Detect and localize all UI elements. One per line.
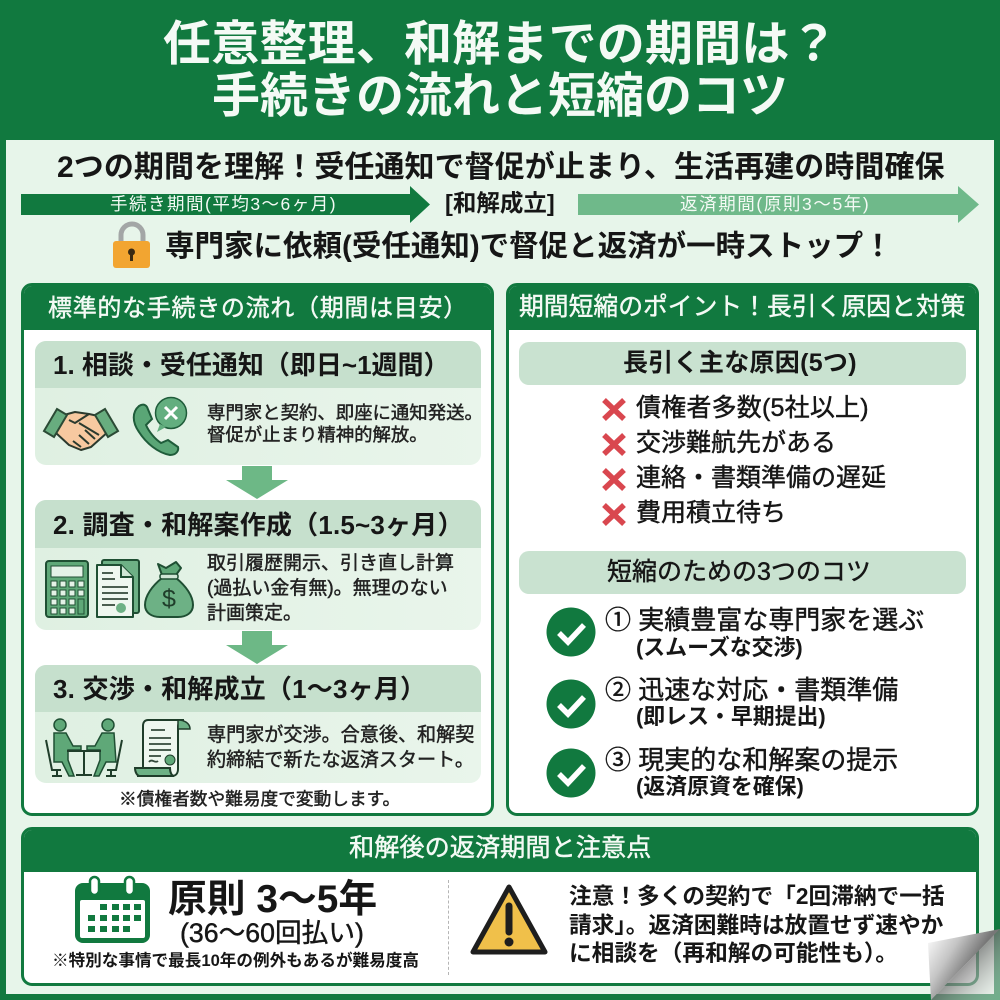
- timeline arrow: repayment period: [578, 186, 979, 223]
- exception note: ※特別な事情で最長10年の例外もあるが難易度高: [52, 951, 419, 970]
- step 1 header: [35, 341, 481, 388]
- icon: money bag: [144, 561, 194, 618]
- icon: red cross 4: [602, 503, 626, 526]
- step 2 header: [35, 500, 481, 548]
- icon: red cross 1: [602, 398, 626, 421]
- icon: contract scroll: [134, 719, 191, 777]
- step 2 text: [207, 552, 454, 624]
- tip 2: ② 迅速な対応・書類準備: [605, 675, 898, 705]
- step 2 card: [35, 500, 481, 630]
- step 3 text: 専門家が交渉。合意後、和解契: [207, 725, 474, 746]
- icon: money bag: $: [162, 585, 176, 613]
- tips heading bar: [519, 551, 966, 594]
- step 3 text: [207, 724, 474, 771]
- arrow: step 1 to 2: [226, 466, 288, 499]
- icon: documents: [96, 559, 140, 618]
- icon: check 3: [546, 748, 596, 798]
- step 1 card: [35, 341, 481, 465]
- repayment count: (36～60回払い): [180, 918, 364, 948]
- panel: standard flow: [21, 283, 494, 816]
- tips heading: 短縮のための3つのコツ: [607, 558, 871, 586]
- bottom heading: 和解後の返済期間と注意点: [349, 834, 651, 862]
- title line 1: 任意整理、和解までの期間は？: [163, 18, 838, 71]
- arrow: step 2 to 3: [226, 631, 288, 664]
- stop notice: 専門家に依頼(受任通知)で督促と返済が一時ストップ！: [165, 230, 893, 263]
- step 3 card: [35, 665, 481, 783]
- procedure period label: 手続き期間(平均3～6ヶ月): [110, 194, 337, 214]
- footnote: ※債権者数や難易度で変動します。: [119, 789, 400, 809]
- caution text: 注意！多くの契約で「2回滞納で一括: [569, 883, 945, 909]
- cause 1: 債権者多数(5社以上): [636, 394, 869, 422]
- tip 3: ③ 現実的な和解案の提示: [605, 745, 898, 775]
- cause 2: 交渉難航先がある: [636, 429, 836, 457]
- divider: [448, 880, 449, 975]
- step 1 text: [207, 402, 483, 445]
- panel: after settlement: [21, 827, 979, 986]
- step 2 text: (過払い金有無)。無理のない: [207, 578, 448, 599]
- subtitle: 2つの期間を理解！受任通知で督促が止まり、生活再建の時間確保: [57, 151, 945, 184]
- step 3 text: 約締結で新たな返済スタート。: [207, 750, 474, 771]
- tip 2 note: (即レス・早期提出): [636, 704, 826, 729]
- caution text: 請求」。返済困難時は放置せず速やか: [569, 912, 943, 938]
- step 2 text: 取引履歴開示、引き直し計算: [207, 553, 454, 574]
- panel header: [509, 286, 976, 330]
- causes heading: 長引く主な原因(5つ): [623, 349, 857, 377]
- tip 3 note: (返済原資を確保): [636, 774, 804, 799]
- icon: red cross 2: [602, 433, 626, 456]
- cause 3: 連絡・書類準備の遅延: [636, 464, 886, 492]
- panel header: [24, 286, 491, 330]
- repayment period label: 返済期間(原則3～5年): [680, 194, 870, 214]
- page curl: [928, 929, 1000, 1000]
- causes heading bar: [519, 342, 966, 385]
- shortening heading: 期間短縮のポイント！長引く原因と対策: [519, 294, 965, 321]
- step 1 text: 専門家と契約、即座に通知発送。: [207, 402, 483, 423]
- step 1 text: 督促が止まり精神的解放。: [207, 424, 428, 445]
- tip 1: ① 実績豊富な専門家を選ぶ: [605, 605, 924, 635]
- icon: check 2: [546, 680, 596, 728]
- timeline arrow: procedure period: [21, 186, 430, 223]
- panel header: [24, 830, 976, 872]
- icon: handshake: [42, 408, 120, 451]
- icon: calendar: [75, 876, 150, 943]
- step 1 title: 1. 相談・受任通知（即日~1週間）: [53, 350, 450, 380]
- step 2 text: 計画策定。: [207, 603, 302, 624]
- cause 4: 費用積立待ち: [636, 499, 786, 527]
- step 2 title: 2. 調査・和解案作成（1.5~3ヶ月）: [53, 510, 464, 540]
- icon: calculator: [45, 560, 89, 618]
- flow heading: 標準的な手続きの流れ（期間は目安）: [48, 295, 468, 322]
- icon: padlock: [113, 222, 150, 268]
- icon: warning triangle: [470, 884, 548, 954]
- step 3 title: 3. 交渉・和解成立（1～3ヶ月）: [53, 674, 426, 704]
- causes list: [602, 394, 886, 527]
- title line 2: 手続きの流れと短縮のコツ: [212, 70, 788, 123]
- caution text: [569, 883, 945, 966]
- step 3 header: [35, 665, 481, 712]
- caution text: に相談を（再和解の可能性も）。: [569, 940, 898, 966]
- icon: two people meeting: [45, 718, 123, 777]
- panel: shortening points: [506, 283, 979, 816]
- icon: red cross 3: [602, 468, 626, 491]
- repayment period value: 原則 3～5年: [168, 878, 377, 921]
- tip 1 note: (スムーズな交渉): [636, 635, 803, 660]
- icon: phone with blocked bubble: [132, 396, 188, 456]
- icon: check 1: [546, 608, 596, 656]
- header band: [0, 0, 1000, 140]
- settlement label: [和解成立]: [445, 190, 555, 216]
